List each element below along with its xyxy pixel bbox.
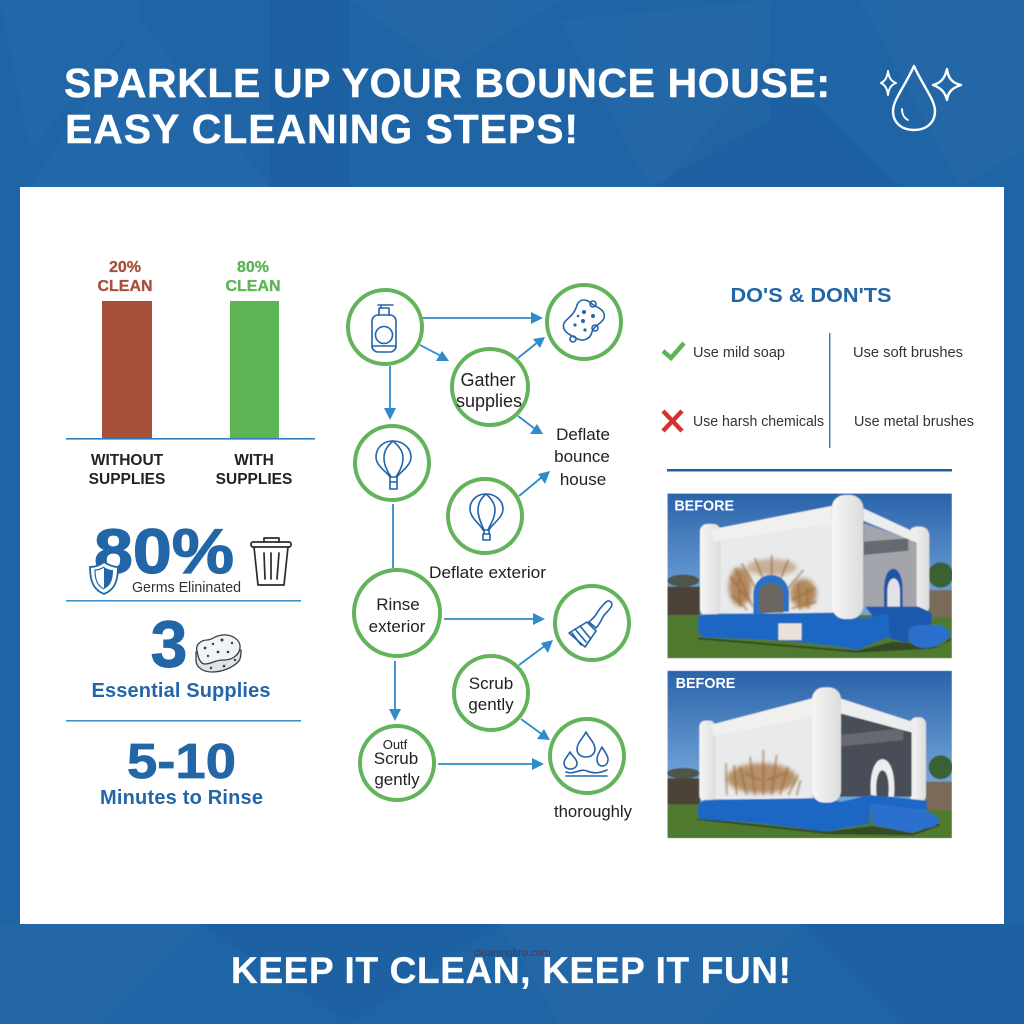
- label: deflate bounce house: house: [560, 470, 606, 489]
- step: outf scrub gently: Outf: [383, 737, 408, 752]
- heading: DO'S & DON'TS: [730, 285, 892, 307]
- label: before: BEFORE: [674, 499, 734, 515]
- stat: 3 essential supplies: Essential Supplies: [92, 680, 270, 702]
- photo: second bounce house: [667, 671, 953, 838]
- white content panel: [20, 187, 1004, 924]
- photos: bounce house: [667, 493, 953, 838]
- bar: without supplies: [89, 259, 165, 488]
- label: deflate bounce house: Deflate: [556, 425, 610, 444]
- label: deflate exterior: Deflate exterior: [429, 563, 546, 582]
- icon: shield: [90, 562, 118, 594]
- bar: with supplies: [216, 259, 292, 488]
- step: scrub gently: gently: [468, 695, 514, 714]
- text: do items: [693, 344, 963, 361]
- stat: 5-10 minutes to rinse: [100, 735, 263, 809]
- icon: water drop with sparkles: [881, 66, 961, 130]
- stat: 80% germs eliminated: Germs Elininated: [132, 580, 241, 596]
- step: gather supplies: [452, 349, 528, 425]
- step: rinse exterior: Rinse: [376, 595, 420, 614]
- stat: 80% germs eliminated: 80%: [94, 517, 234, 587]
- bar: with supplies: 80%: [237, 259, 269, 276]
- label: deflate bounce house: [554, 425, 610, 489]
- text: don't items: [693, 413, 974, 430]
- label: deflate bounce house: bounce: [554, 447, 610, 466]
- text: don't items: Use metal brushes: [854, 413, 974, 430]
- text: don't items: Use harsh chemicals: [693, 413, 824, 430]
- title: EASY CLEANING STEPS!: [65, 106, 578, 152]
- step: outf scrub gently: [360, 726, 434, 800]
- step: outf scrub gently: Scrub: [374, 749, 418, 768]
- step: rinse exterior: exterior: [369, 617, 426, 636]
- title: SPARKLE UP YOUR BOUNCE HOUSE:: [64, 60, 830, 106]
- step: sponge: [547, 285, 621, 359]
- step: gather supplies: supplies: [456, 391, 522, 411]
- step: water drops: [550, 719, 624, 793]
- bar: without supplies: 20%: [109, 259, 141, 276]
- bar: without supplies: SUPPLIES: [89, 471, 165, 488]
- step: soap bottle: [348, 290, 422, 364]
- step: balloon 2: [448, 479, 522, 553]
- stat: 5-10 minutes to rinse: Minutes to Rinse: [100, 787, 263, 809]
- stat: 3 essential supplies: 3: [151, 607, 187, 681]
- label: before second: BEFORE: [676, 676, 735, 692]
- step: gather supplies: Gather: [460, 370, 516, 390]
- photo: first bounce house: [667, 493, 953, 658]
- stat: 5-10 minutes to rinse: 5-10: [127, 735, 236, 789]
- title: [64, 60, 830, 152]
- icon: red cross: [663, 411, 682, 431]
- text: do items: Use mild soap: [693, 344, 785, 361]
- step: rinse exterior: [354, 570, 440, 656]
- text: do items: Use soft brushes: [853, 344, 963, 361]
- step: scrub gently: [454, 656, 528, 730]
- icon: trash can: [251, 538, 291, 585]
- flow diagram: [348, 285, 632, 821]
- step: outf scrub gently: gently: [374, 770, 420, 789]
- stat: 80% germs eliminated: [90, 517, 291, 596]
- panel: do's and don'ts: [663, 285, 974, 472]
- bar: with supplies: WITH: [234, 452, 274, 469]
- step: brush: [555, 586, 629, 660]
- footer tagline: KEEP IT CLEAN, KEEP IT FUN!: [231, 950, 791, 991]
- icon: green check: [663, 343, 684, 358]
- watermark: cleaningbro.com: [473, 947, 551, 959]
- arrows: [384, 312, 553, 770]
- step: scrub gently: Scrub: [469, 674, 513, 693]
- icon: sponge: [196, 635, 241, 672]
- stat: 3 essential supplies: [92, 607, 270, 702]
- bar chart: with and without supplies: [66, 259, 315, 488]
- step: balloon: [355, 426, 429, 500]
- bar: with supplies: CLEAN: [225, 278, 281, 295]
- bar: without supplies: WITHOUT: [91, 452, 164, 469]
- bar: without supplies: CLEAN: [97, 278, 153, 295]
- bar: with supplies: SUPPLIES: [216, 471, 292, 488]
- label: thoroughly: thoroughly: [554, 802, 632, 821]
